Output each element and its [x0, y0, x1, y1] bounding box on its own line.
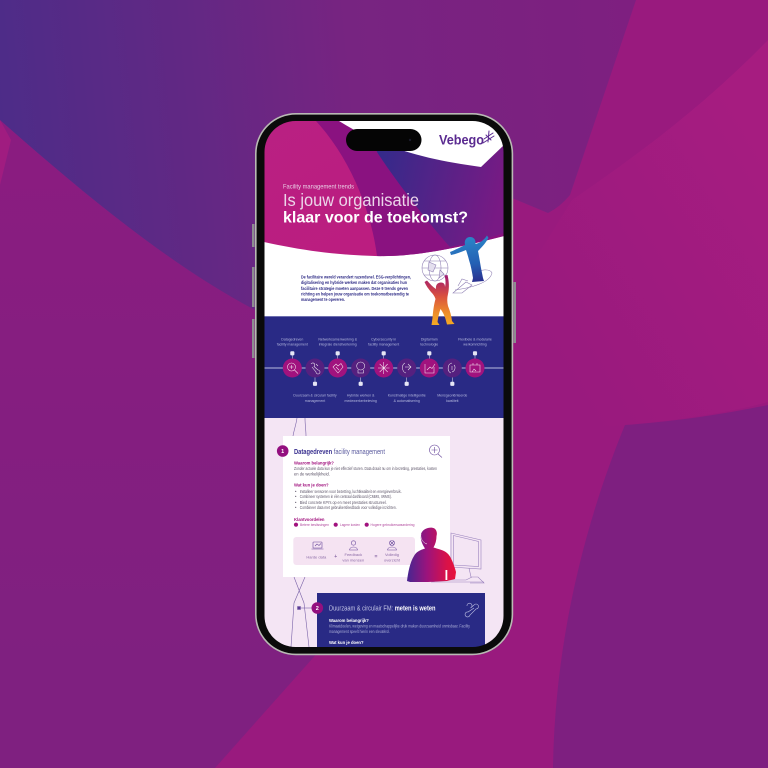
customer benefits: Betere beslissingen [300, 522, 329, 527]
timeline labels top: Cybersecurity in [371, 337, 396, 341]
timeline labels bottom: & automatisering [394, 399, 420, 403]
timeline labels bottom [293, 394, 467, 403]
intro text: digitalisering en hybride werken maken dat organisaties hun [301, 280, 407, 285]
card 1 icon [430, 445, 442, 458]
card 2: duurzaam en circulair FM [312, 593, 485, 653]
why important: Zonder actuele data kun je niet effectief sturen. Data draait nu om in bezetting, prestaties, kosten [294, 466, 438, 471]
equation panel: Feedback [345, 552, 362, 557]
equation panel [293, 537, 415, 565]
lavender content section [264, 418, 504, 647]
what you can do: Bied concrete KPI's op en meet prestaties structureel. [300, 500, 387, 505]
illustration: globe and rocket line art [422, 255, 492, 293]
timeline labels top: Netwerksamenwerking & [318, 337, 358, 341]
header banner [264, 121, 504, 256]
timeline labels bottom: management [305, 399, 325, 403]
timeline labels top: facility management [277, 343, 308, 347]
card 2 body: Klimaatdoelen, wetgeving en maatschappelijke druk maken duurzaamheid onmisbaar. Facility [329, 624, 471, 628]
timeline labels top: Digital twin [421, 337, 438, 341]
what you can do: Combineer systemen in één centraal dashboard (CMMS, IWMS). [300, 494, 392, 499]
what you can do: Combineer data met gebruikersfeedback voor volledige inzichten. [300, 505, 397, 510]
card 1: datagedreven facility management [277, 436, 450, 577]
phone frame [256, 114, 512, 654]
timeline labels bottom: kwaliteit [446, 399, 459, 403]
timeline labels bottom: Hybride werken & [347, 394, 375, 398]
intro text [301, 275, 411, 302]
what you can do: • [295, 500, 297, 505]
timeline pins [290, 352, 477, 386]
timeline labels top [277, 337, 492, 347]
timeline labels top: technologie [420, 343, 438, 347]
connector lines [291, 418, 312, 647]
card 1 number badge: 1 [281, 449, 284, 455]
timeline labels top: Datagedreven [281, 337, 303, 341]
logo: Vebego [439, 132, 484, 148]
card 2 body: Wat kun je doen? [329, 640, 364, 645]
customer benefits: Lagere kosten [340, 522, 360, 527]
what you can do: Wat kun je doen? [294, 482, 329, 488]
illustration: person lifting globe [424, 275, 454, 325]
customer benefits: Klantvoordelen [294, 517, 325, 522]
timeline icons [288, 362, 480, 374]
screen content [264, 121, 504, 653]
equation panel: Harde data [306, 554, 327, 560]
phone mockup [252, 114, 516, 654]
what you can do: • [295, 505, 297, 510]
card 2 title: Duurzaam & circulair FM: meten is weten [329, 604, 436, 612]
card 1 number badge [277, 445, 289, 457]
card 2 body [329, 618, 471, 645]
timeline labels top: Flexibele & modulaire [458, 337, 492, 341]
timeline labels top: facility management [368, 343, 399, 347]
header title: klaar voor de toekomst? [283, 210, 468, 226]
timeline labels top: integrale dienstverlening [319, 343, 357, 347]
timeline labels bottom: Duurzaam & circulair facility [293, 394, 337, 398]
timeline labels bottom: Mensgeoriënteerde [437, 394, 467, 398]
why important [294, 460, 438, 476]
intro text: management te opereren. [301, 297, 345, 302]
card 1 title: Datagedreven facility management [294, 447, 386, 456]
timeline labels bottom: Kunstmatige intelligentie [388, 394, 426, 398]
card 2 body: Waarom belangrijk? [329, 618, 369, 623]
illustration: person with headset [407, 528, 456, 582]
camera island [346, 129, 422, 151]
timeline labels bottom: medewerkerbeleving [345, 399, 377, 403]
equation panel: + [334, 554, 337, 560]
illustration: monitor and desk line art [431, 533, 484, 583]
equation panel: = [375, 554, 378, 560]
card 2 number badge [312, 602, 323, 614]
equation panel: overzicht [384, 557, 401, 562]
intro text: De facilitaire wereld verandert razendsnel. ESG-verplichtingen, [301, 275, 411, 280]
intro text: facilitaire strategie moeten aanpassen. Deze 9 trends geven [301, 286, 408, 291]
customer benefits [294, 517, 414, 527]
why important: en de werkelijkheid. [294, 472, 330, 476]
equation panel: van mensen [342, 557, 364, 562]
what you can do: • [295, 494, 297, 499]
timeline circles [283, 358, 484, 378]
what you can do [294, 482, 402, 510]
card 2 body: management speelt hierin een sleutelrol. [329, 629, 390, 634]
customer benefits: Hogere gebruikerswaardering [370, 522, 414, 527]
card 2 number badge: 2 [316, 606, 319, 612]
header kicker: Facility management trends [283, 184, 354, 190]
trend timeline band [264, 316, 504, 418]
why important: Waarom belangrijk? [294, 460, 334, 466]
intro text: richting en helpen jouw organisatie om toekomstbestendig te [301, 291, 410, 296]
header title [284, 193, 468, 222]
header title: Is jouw organisatie [283, 190, 419, 210]
side buttons [252, 224, 516, 358]
timeline labels top: werkomrichting [463, 343, 487, 347]
equation panel: Volledig [385, 552, 399, 557]
what you can do: • [295, 489, 297, 494]
what you can do: Installeer sensoren voor bezetting, luchtkwaliteit en energieverbruik. [300, 489, 402, 494]
illustration: person on cloud [450, 236, 488, 282]
card 2 icon [465, 603, 478, 617]
